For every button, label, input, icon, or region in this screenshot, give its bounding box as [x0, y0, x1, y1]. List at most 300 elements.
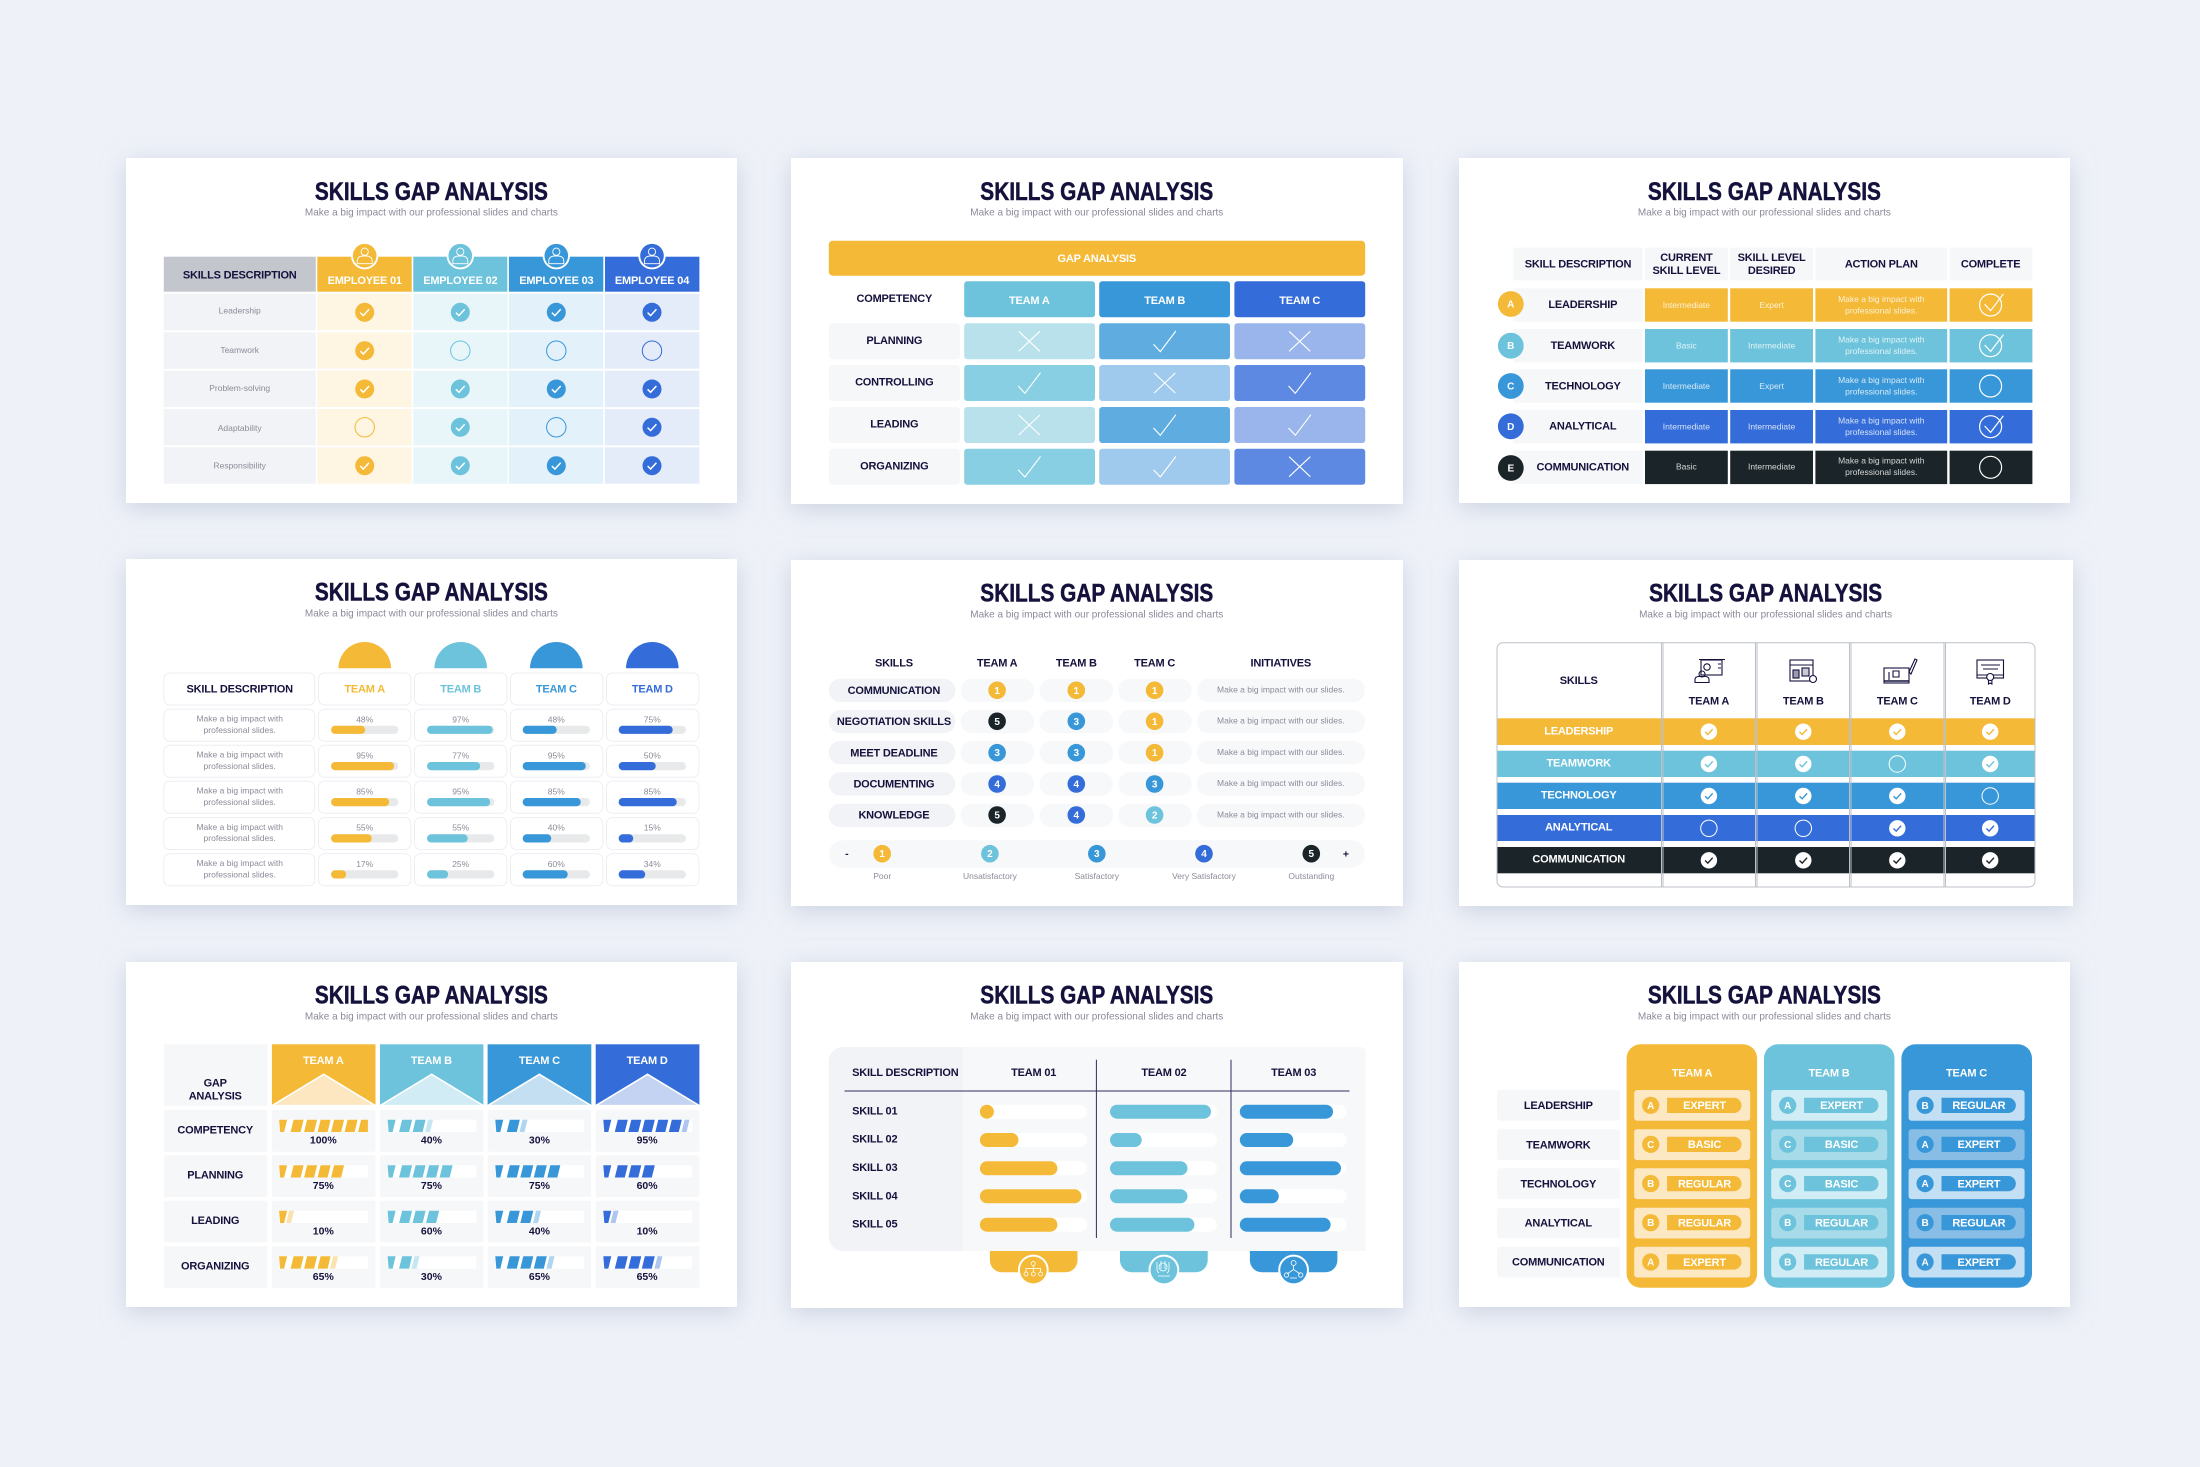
row: leadership: A: [1507, 300, 1514, 310]
rating legend: Poor: [873, 871, 891, 881]
team tabs: [990, 1251, 1337, 1272]
rating badges: 2: [1152, 810, 1158, 822]
row: communication: Make a big impact with: [1838, 456, 1925, 466]
row labels: LEADING: [191, 1215, 239, 1227]
subtitle: Make a big impact with our professional slides and charts: [1638, 206, 1891, 218]
percentages: 17%: [356, 859, 374, 869]
row labels: [829, 323, 960, 485]
rating badges: 3: [1152, 780, 1158, 790]
description text: Make a big impact with: [196, 750, 283, 760]
column: team A: REGULAR: [1678, 1218, 1731, 1230]
icon: team B browser: [1790, 660, 1816, 682]
description text: Make a big impact with: [196, 822, 283, 832]
header labels: SKILL DESCRIPTION: [186, 683, 293, 695]
column: team B: BASIC: [1825, 1139, 1858, 1151]
icons: employee avatars: [351, 242, 666, 269]
percentages: 60%: [548, 859, 565, 869]
column: team A: BASIC: [1688, 1139, 1721, 1151]
header labels: SKILLS DESCRIPTION: [183, 270, 297, 282]
percentages: 85%: [644, 787, 661, 797]
row: analytical: professional slides.: [1845, 427, 1917, 437]
percentages: 40%: [421, 1135, 443, 1147]
rating badges: 3: [1074, 717, 1080, 728]
row: communication: E: [1507, 464, 1514, 474]
percentages: 10%: [313, 1225, 334, 1237]
initiatives text: Make a big impact with our slides.: [1217, 809, 1345, 819]
header: team A: TEAM A: [303, 1055, 344, 1067]
panel: gap analysis by competency: [791, 158, 1403, 504]
skill labels: MEET DEADLINE: [850, 747, 938, 759]
row labels: ANALYTICAL: [1525, 1218, 1592, 1230]
percentages: 95%: [548, 751, 565, 761]
rating badges: 1: [1152, 686, 1158, 697]
row labels: [177, 1124, 254, 1273]
column: team B: B: [1784, 1218, 1791, 1229]
percentages: 40%: [548, 823, 565, 833]
band check marks: [1701, 724, 1998, 868]
column headers: SKILL LEVEL: [1738, 252, 1806, 264]
percentages: 75%: [421, 1180, 443, 1192]
percentages: 10%: [637, 1225, 658, 1237]
header: team B: [380, 1044, 483, 1106]
team headers: TEAM A: [1009, 295, 1050, 307]
skill labels: Responsibility: [213, 461, 267, 471]
rating legend: -: [845, 848, 849, 860]
column: team B: [1764, 1044, 1894, 1288]
header: team B: TEAM B: [411, 1055, 452, 1067]
column headers: [875, 658, 1311, 670]
percentages: 77%: [452, 751, 470, 761]
row labels: [1497, 1090, 1620, 1278]
column headers: CURRENT: [1660, 252, 1713, 264]
icon: team 03 badge: [1278, 1255, 1309, 1285]
percentages: 40%: [529, 1225, 551, 1237]
header labels: EMPLOYEE 04: [615, 275, 690, 287]
title: SKILLS GAP ANALYSIS: [315, 579, 548, 607]
skill labels: SKILL 04: [852, 1190, 898, 1202]
percentages: [310, 1135, 658, 1283]
team headers: COMPETENCY: [856, 293, 933, 305]
table cells: [164, 1110, 699, 1288]
cell grid: [164, 673, 699, 886]
column: team B: C: [1784, 1140, 1791, 1151]
title: SKILLS GAP ANALYSIS: [1648, 981, 1881, 1009]
title: SKILLS GAP ANALYSIS: [1649, 579, 1882, 607]
bars: team 02: [1110, 1105, 1211, 1232]
percentages: 15%: [644, 823, 661, 833]
row: teamwork: Intermediate: [1748, 341, 1795, 351]
header labels: EMPLOYEE 02: [423, 275, 497, 287]
row: teamwork: Basic: [1676, 341, 1698, 351]
column: team A: B: [1647, 1218, 1654, 1229]
skill labels: DOCUMENTING: [853, 778, 934, 790]
bars: team 01: [980, 1105, 1082, 1232]
percentages: [356, 714, 661, 869]
column headers: SKILL LEVEL: [1652, 265, 1721, 277]
colour bands: [1497, 718, 2035, 873]
header: team D: TEAM D: [627, 1055, 668, 1067]
row: communication: Intermediate: [1748, 462, 1795, 472]
team headers: [856, 281, 1365, 317]
bar tracks: [980, 1105, 1347, 1232]
bar tracks: [331, 726, 686, 878]
row labels: COMPETENCY: [177, 1124, 254, 1136]
skill labels: Teamwork: [220, 345, 260, 355]
rating badges: 1: [1074, 686, 1080, 697]
rating cells: [964, 323, 1365, 485]
column headers: TEAM D: [1970, 695, 2011, 707]
percentages: 75%: [644, 714, 661, 724]
column headers: [1560, 675, 2011, 707]
column: team B: A: [1784, 1101, 1791, 1112]
row: leadership: professional slides.: [1845, 306, 1917, 316]
header labels: SKILL DESCRIPTION: [852, 1067, 959, 1079]
rating badges: 1: [994, 686, 1000, 697]
subtitle: Make a big impact with our professional slides and charts: [970, 1010, 1223, 1022]
icon: team A presentation: [1695, 660, 1725, 682]
header labels: TEAM C: [536, 683, 577, 695]
row: technology: Make a big impact with: [1838, 375, 1925, 385]
column: team C: [1901, 1044, 2032, 1288]
row: technology: professional slides.: [1845, 386, 1917, 396]
percentages: 55%: [356, 823, 374, 833]
percentages: 85%: [356, 787, 374, 797]
rating badges: 4: [994, 780, 1000, 790]
icon: team 01 badge: [1018, 1255, 1049, 1285]
percentages: 50%: [644, 751, 661, 761]
band labels: COMMUNICATION: [1532, 854, 1625, 866]
column: team A: B: [1647, 1179, 1654, 1190]
title: SKILLS GAP ANALYSIS: [315, 981, 548, 1009]
row: leadership: [1498, 288, 2032, 322]
description text: professional slides.: [204, 869, 276, 879]
column: team A: EXPERT: [1683, 1257, 1726, 1269]
rating badges: 1: [1152, 748, 1158, 759]
skill labels: SKILL 01: [852, 1105, 897, 1117]
table background: [164, 257, 699, 484]
rating legend: [829, 840, 1365, 881]
column: team A: A: [1647, 1258, 1654, 1268]
skill labels: Problem-solving: [209, 383, 270, 393]
row: technology: Intermediate: [1663, 381, 1710, 391]
row labels: LEADING: [870, 419, 918, 431]
skill labels: KNOWLEDGE: [858, 810, 929, 822]
striped bars: [279, 1120, 690, 1269]
title: SKILLS GAP ANALYSIS: [315, 178, 548, 206]
column headers: TEAM A: [1689, 695, 1729, 707]
subtitle: Make a big impact with our professional slides and charts: [305, 608, 558, 620]
bar tracks: [279, 1120, 692, 1269]
title: SKILLS GAP ANALYSIS: [1648, 178, 1881, 206]
column: team C: EXPERT: [1957, 1139, 2001, 1151]
row: teamwork: B: [1507, 341, 1514, 352]
percentages: 65%: [313, 1271, 334, 1283]
description text: professional slides.: [204, 797, 276, 807]
header labels: EMPLOYEE 03: [519, 275, 593, 287]
row labels: ORGANIZING: [860, 460, 928, 472]
rating legend: +: [1343, 848, 1349, 860]
row: teamwork: TEAMWORK: [1551, 340, 1615, 352]
column: team A: [1627, 1044, 1757, 1288]
column: team C: TEAM C: [1946, 1068, 1987, 1080]
rating badges: 1: [1152, 717, 1158, 728]
header: team C: TEAM C: [519, 1055, 560, 1067]
initiatives text: Make a big impact with our slides.: [1217, 684, 1345, 694]
header labels: EMPLOYEE 01: [328, 275, 402, 287]
row labels: PLANNING: [866, 335, 922, 347]
percentages: 85%: [548, 787, 565, 797]
rating legend: 4: [1201, 849, 1207, 860]
rating legend: Unsatisfactory: [963, 871, 1018, 881]
rating legend: Satisfactory: [1075, 871, 1120, 881]
band labels: TEAMWORK: [1547, 758, 1611, 770]
table frame: [1497, 643, 2035, 887]
row labels: PLANNING: [187, 1170, 243, 1182]
row: leadership: LEADERSHIP: [1548, 299, 1617, 311]
skill labels: NEGOTIATION SKILLS: [837, 716, 951, 728]
row: technology: Expert: [1759, 381, 1785, 391]
column: team C: A: [1921, 1140, 1929, 1151]
row: communication: [1498, 451, 2032, 484]
panel: team skills bands: [1459, 560, 2073, 906]
subtitle: Make a big impact with our professional slides and charts: [1639, 608, 1892, 620]
rating badges: 3: [994, 748, 1000, 759]
panel: team skill levels: [1459, 962, 2070, 1307]
column: team C: A: [1921, 1258, 1929, 1268]
header labels: TEAM D: [632, 683, 673, 695]
percentages: 60%: [421, 1225, 443, 1237]
percentages: 48%: [548, 714, 565, 724]
header: gap analysis: GAP: [204, 1077, 227, 1089]
percentages: 97%: [452, 714, 470, 724]
row: communication: professional slides.: [1845, 467, 1917, 477]
initiatives text: Make a big impact with our slides.: [1217, 778, 1345, 788]
skill labels: Leadership: [219, 305, 261, 315]
initiatives text: Make a big impact with our slides.: [1217, 716, 1345, 726]
rating badges: 4: [1074, 780, 1080, 790]
percentages: 95%: [452, 787, 470, 797]
subtitle: Make a big impact with our professional slides and charts: [970, 206, 1223, 218]
header labels: TEAM B: [440, 683, 481, 695]
column headers: [1513, 248, 2032, 280]
rating badges: 5: [994, 810, 1000, 822]
title: SKILLS GAP ANALYSIS: [980, 178, 1213, 206]
column headers: TEAM C: [1877, 695, 1918, 707]
skill labels: [837, 685, 951, 822]
row: technology: C: [1507, 382, 1514, 392]
header labels: [183, 270, 690, 287]
percentages: 34%: [644, 859, 661, 869]
header labels: [852, 1067, 1316, 1079]
rating legend: 2: [987, 849, 993, 860]
rating badges: 5: [994, 717, 1000, 728]
percentages: 25%: [452, 859, 470, 869]
column: team C: REGULAR: [1952, 1100, 2006, 1112]
header: gap analysis: ANALYSIS: [189, 1090, 242, 1102]
rating legend: 1: [879, 849, 885, 860]
rating badges: 3: [1074, 748, 1080, 759]
panel: striped progress table: [126, 962, 737, 1307]
icon: team 02 badge: [1148, 1255, 1179, 1285]
initiatives text: [1217, 684, 1345, 819]
header: team D: [596, 1044, 699, 1106]
panel: numbered rating table: [791, 560, 1403, 906]
percentages: 65%: [529, 1271, 551, 1283]
column: team C: EXPERT: [1957, 1257, 2001, 1269]
panel: team progress bars: [126, 559, 737, 905]
column: team B: B: [1784, 1258, 1791, 1268]
column: team C: REGULAR: [1952, 1218, 2006, 1230]
row labels: ORGANIZING: [181, 1261, 249, 1273]
percentages: 95%: [637, 1135, 658, 1147]
description text: Make a big impact with: [196, 714, 283, 724]
description text: professional slides.: [204, 725, 276, 735]
skill labels: Adaptability: [218, 423, 262, 433]
banner: GAP ANALYSIS: [1058, 253, 1136, 265]
column: team B: REGULAR: [1815, 1257, 1868, 1269]
description text: professional slides.: [204, 833, 276, 843]
panel: employee check matrix: [126, 158, 737, 503]
row: communication: Basic: [1676, 462, 1698, 472]
band labels: ANALYTICAL: [1545, 822, 1613, 834]
banner: [829, 241, 1365, 276]
percentages: 100%: [310, 1135, 337, 1147]
column: team B: BASIC: [1825, 1178, 1858, 1190]
subtitle: Make a big impact with our professional slides and charts: [1638, 1010, 1891, 1022]
divider lines: [844, 1060, 1350, 1238]
row labels: TECHNOLOGY: [1520, 1178, 1597, 1190]
description text: Make a big impact with: [196, 786, 283, 796]
team headers: TEAM C: [1279, 295, 1320, 307]
row: leadership: Make a big impact with: [1838, 294, 1925, 304]
rating badges: 4: [1074, 810, 1080, 822]
column headers: COMPLETE: [1961, 259, 2020, 271]
row: analytical: ANALYTICAL: [1549, 421, 1617, 433]
row: teamwork: [1498, 329, 2032, 362]
column headers: SKILLS: [875, 658, 913, 670]
row: analytical: Intermediate: [1748, 422, 1795, 432]
header labels: TEAM 01: [1011, 1067, 1056, 1079]
title: SKILLS GAP ANALYSIS: [980, 579, 1213, 607]
rating badges: [988, 682, 1163, 824]
skill labels: SKILL 05: [852, 1218, 897, 1230]
column headers: INITIATIVES: [1251, 658, 1311, 670]
column: team C: A: [1921, 1179, 1929, 1190]
percentages: 30%: [421, 1271, 443, 1283]
row: communication: COMMUNICATION: [1537, 461, 1629, 473]
skill labels: [209, 305, 270, 471]
rating legend: Outstanding: [1288, 871, 1334, 881]
column: team C: EXPERT: [1957, 1178, 2001, 1190]
table background: [829, 1047, 1366, 1251]
row labels: COMMUNICATION: [1512, 1257, 1605, 1269]
percentages: 48%: [356, 714, 374, 724]
column: team A: TEAM A: [1672, 1068, 1713, 1080]
bars: team 03: [1240, 1105, 1341, 1232]
column headers: TEAM B: [1056, 658, 1097, 670]
row: leadership: Intermediate: [1663, 300, 1710, 310]
percentages: 75%: [529, 1180, 551, 1192]
column: team B: C: [1784, 1179, 1791, 1190]
skill labels: SKILL 02: [852, 1134, 897, 1146]
percentages: 60%: [637, 1180, 658, 1192]
header labels: TEAM 03: [1271, 1067, 1316, 1079]
band labels: LEADERSHIP: [1544, 725, 1613, 737]
header labels: [186, 683, 673, 695]
skill labels: COMMUNICATION: [848, 685, 940, 697]
skill labels: [852, 1105, 898, 1230]
check marks: [355, 303, 662, 475]
column: team C: B: [1921, 1218, 1929, 1229]
column: team B: EXPERT: [1820, 1100, 1863, 1112]
icon: team C cheque and pen: [1884, 659, 1917, 683]
column: team A: EXPERT: [1683, 1100, 1726, 1112]
column: team A: C: [1647, 1140, 1654, 1151]
icon: team D certificate: [1977, 660, 2004, 684]
row: leadership: Expert: [1759, 300, 1785, 310]
band labels: TECHNOLOGY: [1541, 790, 1617, 802]
column: team A: REGULAR: [1678, 1178, 1731, 1190]
row: teamwork: professional slides.: [1845, 346, 1917, 356]
row: analytical: Make a big impact with: [1838, 416, 1925, 426]
column headers: ACTION PLAN: [1845, 259, 1918, 271]
column headers: TEAM B: [1783, 695, 1824, 707]
header labels: TEAM A: [344, 683, 385, 695]
header: team C: [488, 1044, 591, 1106]
skill labels: SKILL 03: [852, 1162, 897, 1174]
title: SKILLS GAP ANALYSIS: [980, 981, 1213, 1009]
column headers: SKILLS: [1560, 675, 1598, 687]
panel: skill level action plan: [1459, 158, 2070, 503]
row: teamwork: Make a big impact with: [1838, 335, 1925, 345]
band labels: [1532, 725, 1625, 866]
subtitle: Make a big impact with our professional slides and charts: [305, 1010, 558, 1022]
row: analytical: Intermediate: [1663, 422, 1710, 432]
panel: skill bars by team: [791, 962, 1403, 1308]
row: analytical: D: [1507, 422, 1514, 433]
row labels: LEADERSHIP: [1524, 1100, 1593, 1112]
column headers: TEAM A: [977, 658, 1018, 670]
header: team A: [272, 1044, 376, 1106]
header labels: TEAM 02: [1141, 1067, 1187, 1079]
row pills: [829, 679, 1365, 827]
percentages: 65%: [637, 1271, 658, 1283]
column: team C: B: [1921, 1101, 1929, 1112]
percentages: 55%: [452, 823, 470, 833]
rating legend: 3: [1094, 849, 1100, 860]
percentages: 95%: [356, 751, 374, 761]
initiatives text: Make a big impact with our slides.: [1217, 747, 1345, 757]
row labels: TEAMWORK: [1526, 1139, 1591, 1151]
percentages: 75%: [313, 1180, 334, 1192]
column headers: SKILL DESCRIPTION: [1525, 259, 1631, 271]
description text: [196, 714, 283, 879]
row labels: CONTROLLING: [855, 377, 934, 389]
row: technology: [1498, 369, 2032, 403]
subtitle: Make a big impact with our professional slides and charts: [305, 206, 558, 218]
bar fills: [331, 726, 677, 878]
column: team A: A: [1647, 1101, 1654, 1112]
row: analytical: [1498, 410, 2032, 443]
column headers: DESIRED: [1748, 265, 1796, 277]
rating legend: Very Satisfactory: [1172, 871, 1237, 881]
team headers: TEAM B: [1144, 295, 1185, 307]
subtitle: Make a big impact with our professional slides and charts: [970, 608, 1223, 620]
row: technology: TECHNOLOGY: [1545, 380, 1621, 392]
column: team B: TEAM B: [1809, 1068, 1850, 1080]
header: gap analysis: [164, 1044, 268, 1106]
domes: [338, 642, 679, 668]
